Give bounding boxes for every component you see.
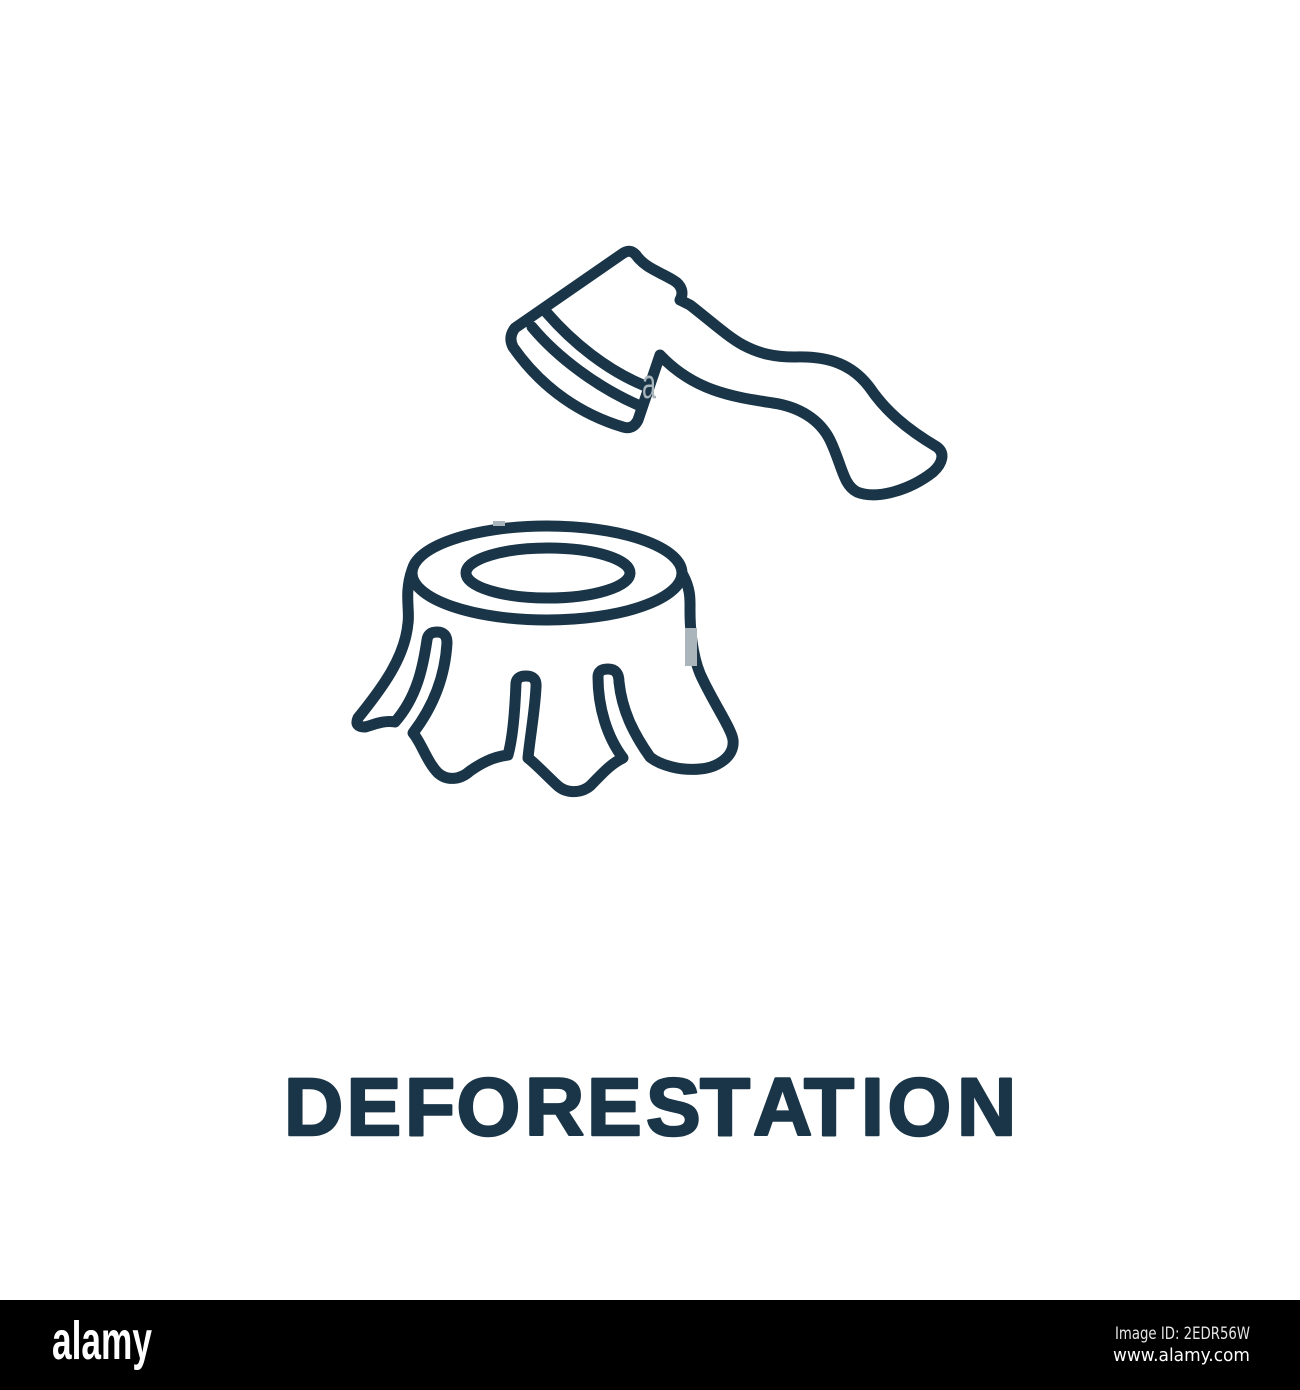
icon: axe: [511, 251, 942, 495]
watermark: fragments on stump: [493, 521, 697, 666]
title: DEFORESTATION: [284, 1062, 1016, 1153]
footer logo: alamy: [52, 1311, 152, 1371]
watermark: letter on axe: a: [642, 360, 656, 407]
icon: tree stump: [357, 526, 733, 792]
footer image id: Image ID: 2EDR56W: [1115, 1324, 1250, 1344]
footer bar: [0, 1300, 1300, 1390]
footer url: www.alamy.com: [1113, 1345, 1250, 1366]
